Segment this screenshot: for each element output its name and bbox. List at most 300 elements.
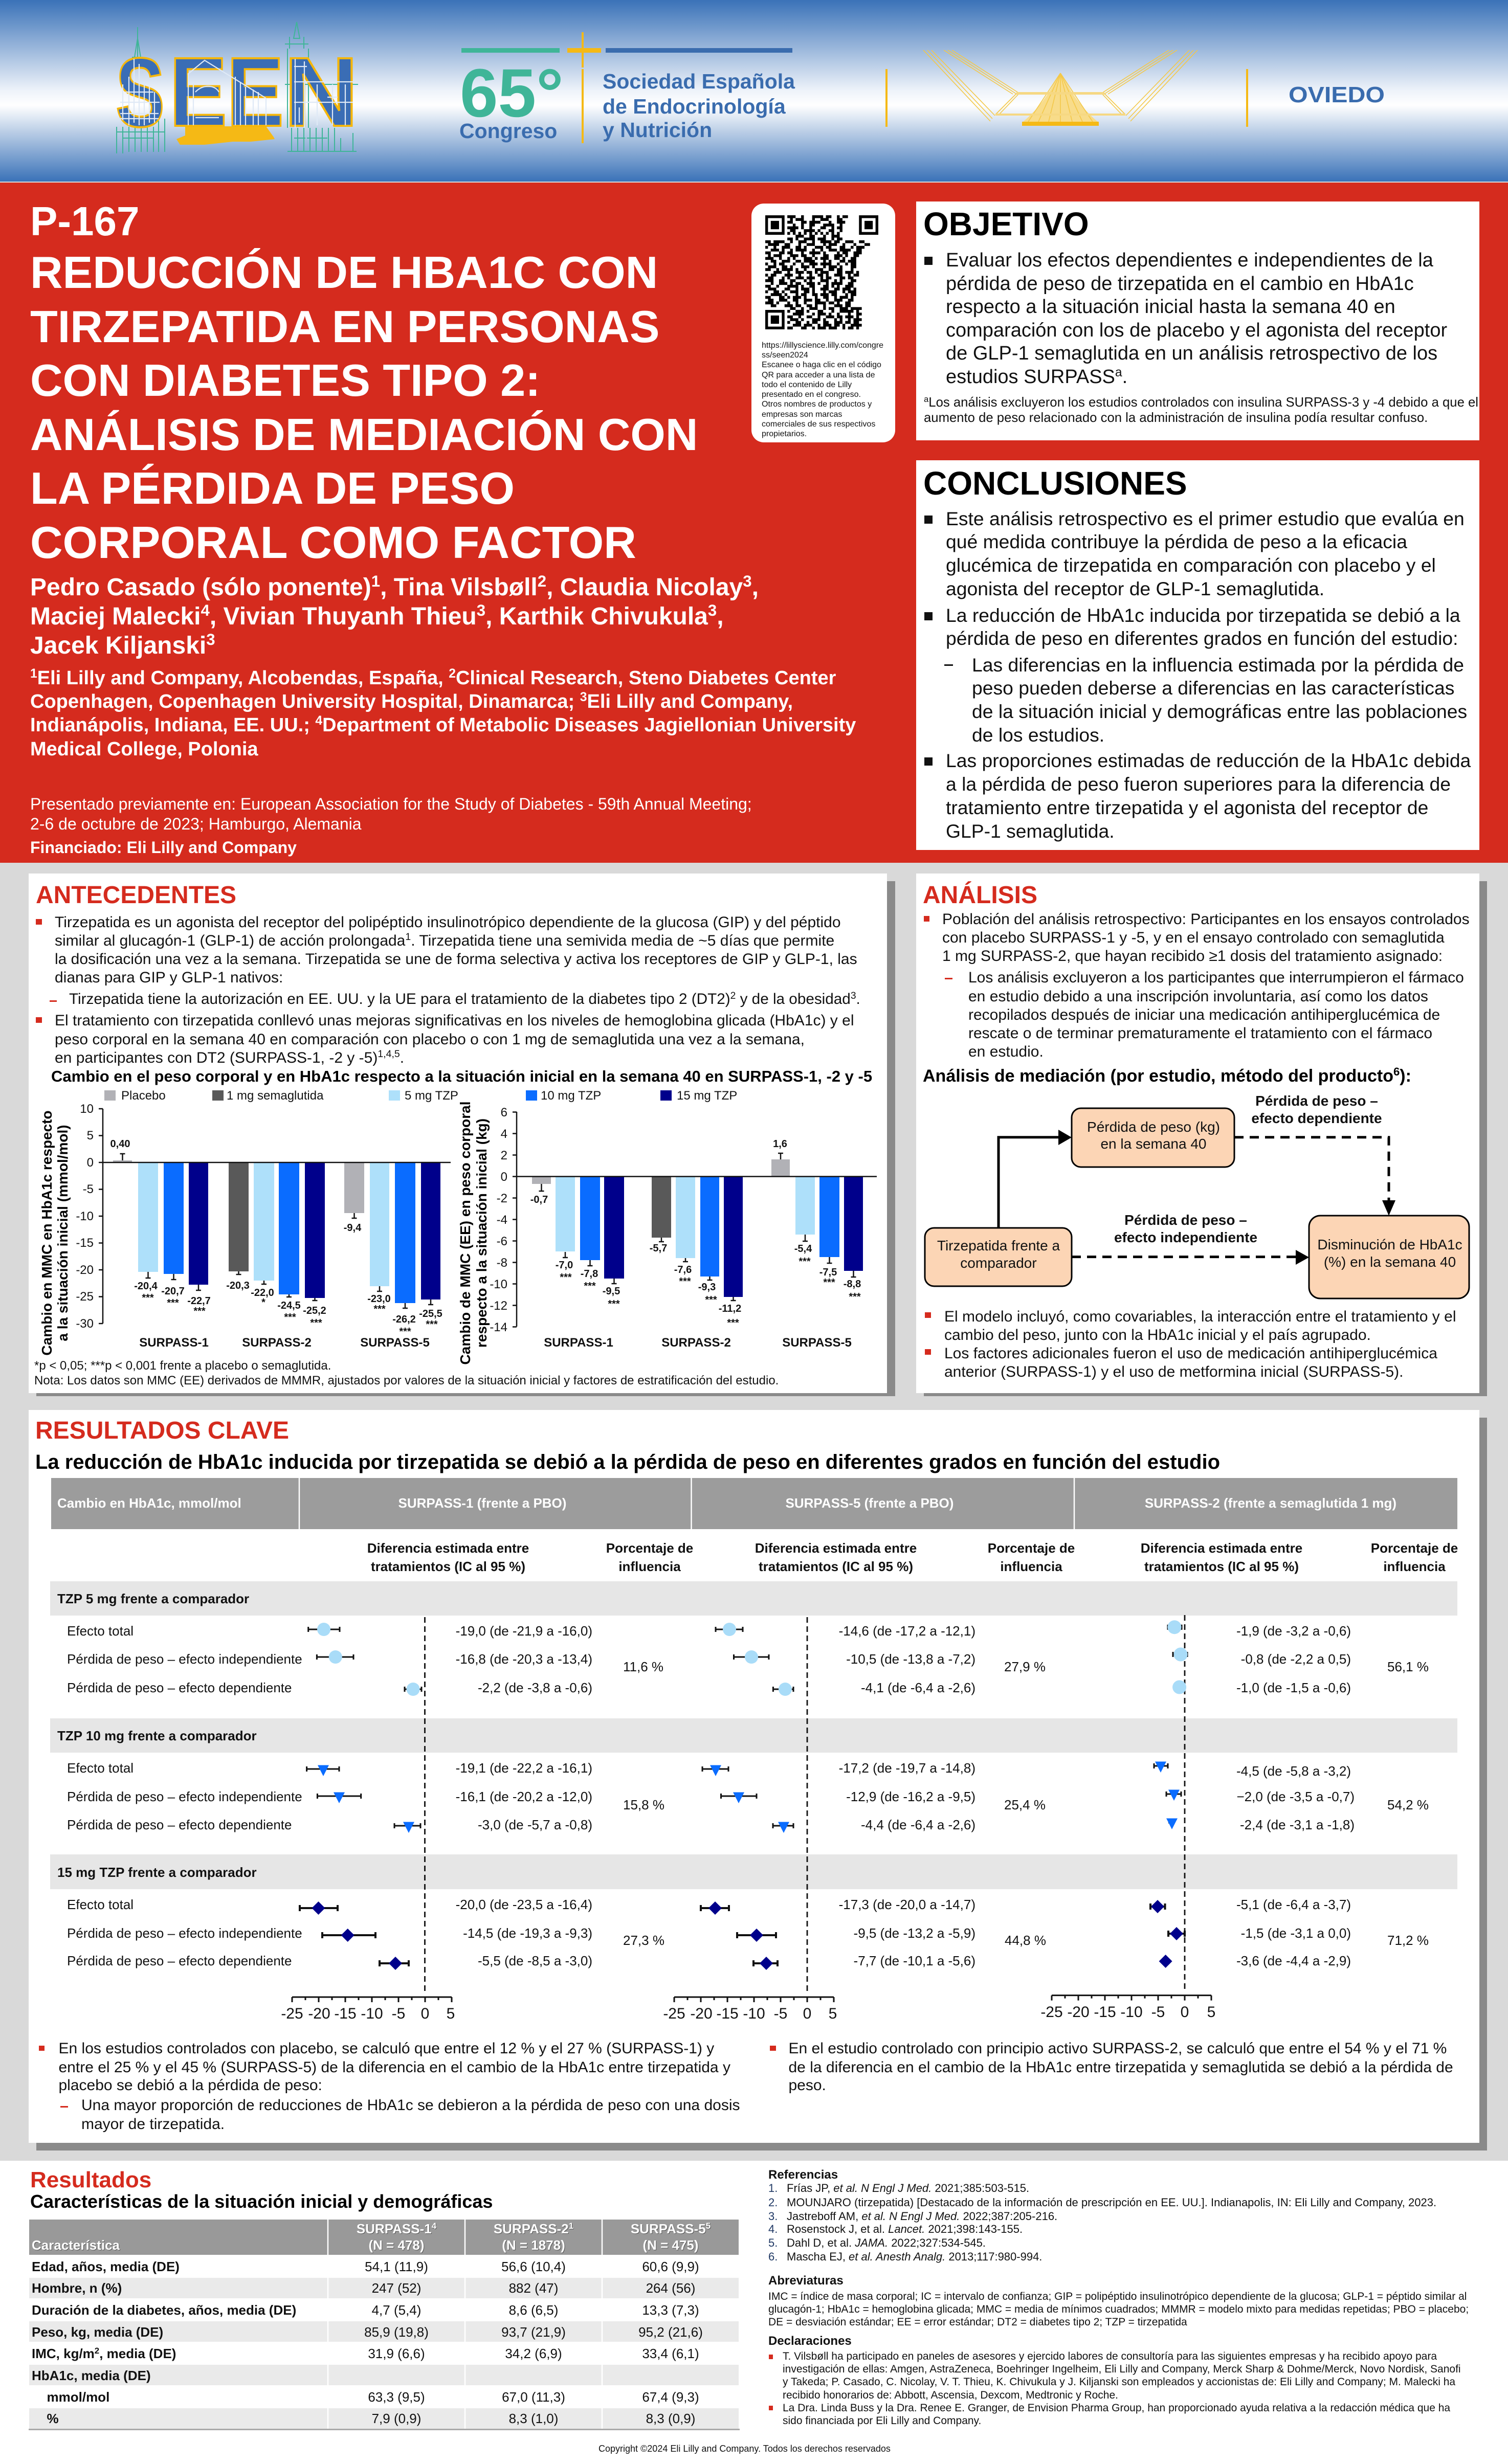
panel: antecedentes — [29, 873, 895, 1396]
row labels: Duración de la diabetes, años, media (DE) — [32, 2302, 296, 2318]
legend: 10 mg TZP — [541, 1089, 601, 1103]
text block: recopilados después de iniciar una medicación antihiperglucémica de — [968, 1006, 1440, 1023]
QR text — [762, 341, 883, 438]
category labels — [139, 1336, 430, 1350]
letters: E — [169, 37, 227, 147]
values: SURPASS-5: -7,7 (de -10,1 a -5,6) — [854, 1953, 975, 1968]
legend — [104, 1089, 737, 1103]
results text left: placebo se debió a la pérdida de peso: — [58, 2077, 322, 2094]
y tick labels: -10 — [490, 1278, 507, 1291]
values: SURPASS-1: -20,0 (de -23,5 a -16,4) — [456, 1897, 592, 1912]
panel: objetivo — [916, 201, 1479, 440]
column subheaders: Porcentaje de — [606, 1540, 693, 1556]
influence percentages: 27,3 % — [623, 1933, 664, 1948]
label: independent effect: efecto independiente — [1114, 1229, 1257, 1245]
column subheaders: Diferencia estimada entre — [367, 1540, 529, 1556]
box: weight loss — [1072, 1108, 1234, 1167]
column subheaders: influencia — [1383, 1559, 1446, 1574]
values: 60,6 (9,9) — [642, 2259, 699, 2274]
header banner — [0, 0, 1508, 182]
table header: Cambio en HbA1c, mmol/mol — [57, 1495, 241, 1511]
influence percentages: 56,1 % — [1387, 1659, 1429, 1674]
values — [364, 2259, 703, 2426]
value labels: -20,7 — [161, 1286, 185, 1297]
letters: E — [227, 37, 284, 147]
label: dependent effect: efecto dependiente — [1251, 1110, 1382, 1126]
value labels: *** — [849, 1291, 861, 1303]
error bars — [120, 1154, 433, 1308]
declarations: T. Vilsbøll ha participado en paneles de asesores y ejercido labores de consultoría para las siguientes empresas y ha recibido apoyo para — [783, 2350, 1437, 2362]
y tick labels: -25 — [76, 1290, 94, 1304]
results text left: Una mayor proporción de reducciones de HbA1c se debieron a la pérdida de peso con una dosis — [81, 2097, 740, 2114]
values: 31,9 (6,6) — [368, 2346, 425, 2361]
affiliations — [30, 667, 856, 760]
abbreviations: glucagón-1; HbA1c = hemoglobina glicada; MMC = media de mínimos cuadrados; MMMR = modelo mixto para medidas repetidas; PBO = placebo; — [768, 2303, 1469, 2315]
text block — [942, 911, 1470, 1060]
values: SURPASS-1: -19,1 (de -22,2 a -16,1) — [456, 1760, 592, 1776]
text block: Tirzepatida tiene la autorización en EE. UU. y la UE para el tratamiento de la diabetes tipo 2 (DT2)2 y de la obesidad3. — [69, 990, 860, 1007]
chart notes: *p < 0,05; ***p < 0,001 frente a placebo o semaglutida. — [34, 1359, 331, 1373]
row labels: % — [47, 2411, 59, 2426]
values: SURPASS-2: -3,6 (de -4,4 a -2,9) — [1236, 1953, 1351, 1968]
value labels: *** — [560, 1272, 572, 1283]
values: 882 (47) — [509, 2280, 558, 2296]
forest axis: SURPASS-2: 5 — [1207, 2004, 1215, 2021]
title — [30, 247, 698, 568]
text block: peso pueden deberse a diferencias en las características — [972, 677, 1454, 699]
legend: 1 mg semaglutida — [227, 1089, 324, 1103]
title: LA PÉRDIDA DE PESO — [30, 463, 515, 513]
authors — [30, 572, 759, 659]
text block — [55, 914, 860, 1066]
values: SURPASS-2 — [1236, 1623, 1355, 1968]
values: 63,3 (9,5) — [368, 2389, 425, 2405]
subheading: La reducción de HbA1c inducida por tirzepatida se debió a la pérdida de peso en diferentes grados en función del estudio — [35, 1451, 1220, 1473]
letters: N — [284, 37, 359, 147]
table header text: (N = 475) — [642, 2237, 699, 2253]
references: 5. — [768, 2236, 778, 2249]
arrow: weight-independent effect — [1072, 1250, 1309, 1265]
value labels: -22,0 — [251, 1287, 274, 1298]
white cathedral lines — [120, 59, 353, 128]
bullets — [924, 516, 953, 766]
table header text: SURPASS-55 — [631, 2221, 711, 2236]
values: SURPASS-1: -19,0 (de -21,9 a -16,0) — [456, 1623, 592, 1639]
y tick labels: 4 — [501, 1127, 507, 1141]
forest axis: SURPASS-2 — [1040, 1996, 1215, 2021]
results text right — [770, 2040, 1453, 2094]
previous presentation note: Financiado: Eli Lilly and Company — [30, 838, 297, 857]
value labels: -5,4 — [794, 1243, 812, 1255]
forest axis: SURPASS-2: -10 — [1120, 2004, 1143, 2021]
axes — [513, 1112, 877, 1327]
declarations: recibido honorarios de: Abbott, Ascensia, Dexcom, Medtronic y Roche. — [783, 2389, 1118, 2401]
category labels: SURPASS-2 — [661, 1336, 731, 1350]
affiliations: Medical College, Polonia — [30, 738, 258, 760]
box: weight loss: en la semana 40 — [1100, 1136, 1207, 1152]
row labels: Pérdida de peso – efecto independiente — [67, 1925, 302, 1941]
forest axis: SURPASS-5: 5 — [829, 2005, 837, 2022]
subheading: Características de la situación inicial y demográficas — [30, 2191, 493, 2212]
declarations: Declaraciones — [768, 2334, 852, 2348]
y tick labels: 2 — [501, 1149, 507, 1162]
QR panel — [751, 204, 895, 442]
values: 93,7 (21,9) — [501, 2324, 566, 2340]
model notes: cambio del peso, junto con la HbA1c inicial y el país agrupado. — [944, 1327, 1371, 1343]
legend: 15 mg TZP — [677, 1089, 737, 1103]
value labels: *** — [193, 1306, 206, 1317]
QR text: Otros nombres de productos y — [762, 400, 872, 409]
values: SURPASS-1: -16,1 (de -20,2 a -12,0) — [456, 1789, 592, 1804]
values: 95,2 (21,6) — [638, 2324, 703, 2340]
value labels: *** — [310, 1317, 322, 1329]
values: 67,4 (9,3) — [642, 2389, 699, 2405]
logo: 65 Congreso: Congreso — [459, 119, 557, 143]
value labels: -5,7 — [650, 1243, 667, 1254]
references: 2. — [768, 2196, 778, 2209]
text block: tratamiento entre tirzepatida y el agonista del receptor de — [946, 797, 1428, 818]
text block: similar al glucagón-1 (GLP-1) de acción prolongada1. Tirzepatida tiene una semivida media de ~5 días que permite — [55, 931, 834, 949]
text block: pérdida de peso de tirzepatida en el cambio en HbA1c — [946, 273, 1414, 295]
values: SURPASS-2: -4,5 (de -5,8 a -3,2) — [1236, 1763, 1351, 1779]
legend: 5 mg TZP — [405, 1089, 458, 1103]
values: 8,6 (6,5) — [509, 2302, 558, 2318]
box: weight loss: Pérdida de peso (kg) — [1087, 1119, 1220, 1135]
y tick labels — [490, 1106, 507, 1334]
values: SURPASS-2: -5,1 (de -6,4 a -3,7) — [1236, 1897, 1351, 1912]
influence percentages — [623, 1659, 1429, 1948]
row labels: Pérdida de peso – efecto independiente — [67, 1651, 302, 1667]
value labels: -9,5 — [603, 1286, 620, 1297]
column subheaders: Diferencia estimada entre — [1141, 1540, 1302, 1556]
label: independent effect: Pérdida de peso – — [1124, 1212, 1247, 1228]
value labels: -7,0 — [556, 1260, 573, 1271]
title: TIRZEPATIDA EN PERSONAS — [30, 301, 659, 352]
table header: SURPASS-1 (frente a PBO) — [398, 1495, 566, 1511]
values: SURPASS-5: -14,6 (de -17,2 a -12,1) — [839, 1623, 975, 1639]
value labels: 1,6 — [773, 1138, 787, 1150]
value labels: -25,5 — [419, 1308, 442, 1319]
column subheaders: tratamientos (IC al 95 %) — [371, 1559, 525, 1574]
authors: Maciej Malecki4, Vivian Thuyanh Thieu3, Karthik Chivukula3, — [30, 601, 724, 630]
values: SURPASS-1: -2,2 (de -3,8 a -0,6) — [478, 1680, 592, 1695]
row labels: Pérdida de peso – efecto dependiente — [67, 1680, 292, 1695]
values: SURPASS-5: -4,1 (de -6,4 a -2,6) — [861, 1680, 975, 1695]
row labels: HbA1c, media (DE) — [32, 2368, 151, 2383]
footnote — [924, 394, 1478, 425]
letters: S — [116, 37, 165, 147]
forest axis: SURPASS-5: -10 — [743, 2005, 765, 2022]
arrow: tirzepatide to weight loss — [999, 1130, 1072, 1228]
text block: rescate o de terminar prematuramente el tratamiento con el fármaco — [968, 1025, 1432, 1042]
footnote: aumento de peso relacionado con la administración de insulina podía resultar confuso. — [924, 411, 1428, 425]
value labels: *** — [373, 1304, 386, 1315]
declarations: y Takeda; P. Casado, C. Nicolay, V. T. Thieu, K. Chivukula y J. Kiljanski son empleados y accionistas de: Eli Lilly and Company; M. Malecki ha — [783, 2376, 1455, 2388]
value labels: *** — [167, 1297, 179, 1309]
declarations: investigación de ellas: Amgen, AstraZeneca, Boehringer Ingelheim, Eli Lilly and Company, Merck Sharp & Dohme/Merck, Novo Nordisk, Sanofi — [783, 2363, 1461, 2375]
row labels — [32, 2259, 296, 2426]
row labels: Peso, kg, media (DE) — [32, 2324, 163, 2340]
title panel (red) — [0, 183, 1508, 863]
references: Frías JP, et al. N Engl J Med. 2021;385:503-515. — [787, 2182, 1029, 2194]
values: SURPASS-2: -1,5 (de -3,1 a 0,0) — [1241, 1925, 1351, 1941]
value labels: -0,7 — [530, 1194, 548, 1205]
column subheaders: Diferencia estimada entre — [755, 1540, 917, 1556]
forest axis: SURPASS-1: -10 — [361, 2005, 383, 2022]
results text left — [39, 2040, 740, 2133]
value labels: -20,4 — [134, 1281, 158, 1292]
value labels: *** — [799, 1256, 811, 1267]
y tick labels: -2 — [497, 1192, 507, 1205]
text block: Evaluar los efectos dependientes e independientes de la — [946, 250, 1434, 271]
forest axis: SURPASS-1: 0 — [421, 2005, 429, 2022]
text block: Población del análisis retrospectivo: Participantes en los ensayos controlados — [942, 911, 1470, 928]
text block: respecto a la situación inicial hasta la semana 40 en — [946, 296, 1395, 318]
text block: en participantes con DT2 (SURPASS-1, -2 y -5)1,4,5. — [55, 1048, 404, 1066]
references: Referencias — [768, 2168, 838, 2182]
affiliations: Indianápolis, Indiana, EE. UU.; 4Department of Metabolic Diseases Jagiellonian University — [30, 714, 856, 736]
values: SURPASS-2: -0,8 (de -2,2 a 0,5) — [1241, 1651, 1351, 1667]
panel: conclusiones — [916, 460, 1479, 850]
value labels: -23,0 — [367, 1293, 391, 1305]
value labels: *** — [142, 1292, 154, 1304]
row labels — [67, 1623, 302, 1968]
column subheaders: Porcentaje de — [1371, 1540, 1458, 1556]
category labels: SURPASS-2 — [242, 1336, 312, 1350]
value labels: -7,6 — [674, 1264, 692, 1275]
flow diagram — [925, 1093, 1469, 1298]
values: SURPASS-2: −2,0 (de -3,5 a -0,7) — [1236, 1789, 1355, 1804]
forest plot: SURPASS-5 — [701, 1623, 793, 1970]
references: 3. — [768, 2210, 778, 2223]
y tick labels: -20 — [76, 1263, 94, 1277]
y tick labels: 6 — [501, 1106, 507, 1119]
forest axis: SURPASS-5 — [663, 1997, 837, 2022]
category labels — [544, 1336, 852, 1350]
category labels: SURPASS-1 — [544, 1336, 613, 1350]
heading: ANTECEDENTES — [36, 882, 236, 909]
title: ANÁLISIS DE MEDIACIÓN CON — [30, 409, 698, 460]
label: dependent effect: Pérdida de peso – — [1255, 1093, 1378, 1109]
references: 6. — [768, 2250, 778, 2263]
forest axis: SURPASS-1: -25 — [281, 2005, 303, 2022]
y axis title — [39, 1110, 71, 1356]
references: Jastreboff AM, et al. N Engl J Med. 2022;387:205-216. — [787, 2210, 1057, 2223]
influence percentages: 15,8 % — [623, 1797, 664, 1812]
forest axis: SURPASS-2: -20 — [1067, 2004, 1090, 2021]
value labels: -11,2 — [719, 1303, 741, 1314]
model notes — [944, 1308, 1456, 1380]
baseline table — [29, 2220, 740, 2430]
group rows — [50, 1581, 1457, 1889]
value labels: *** — [679, 1276, 691, 1287]
abbreviations — [768, 2274, 1469, 2328]
y tick labels: -8 — [497, 1256, 507, 1270]
bullets — [36, 919, 57, 1023]
value labels — [530, 1138, 861, 1329]
value labels: *** — [608, 1298, 620, 1310]
value labels: *** — [727, 1317, 739, 1329]
table header text: (N = 478) — [368, 2237, 425, 2253]
y tick labels: 10 — [80, 1102, 94, 1116]
row labels: Efecto total — [67, 1760, 134, 1776]
values: 4,7 (5,4) — [372, 2302, 421, 2318]
y tick labels: -30 — [76, 1317, 94, 1331]
values: SURPASS-2: -1,9 (de -3,2 a -0,6) — [1236, 1623, 1351, 1639]
values: SURPASS-5: -9,5 (de -13,2 a -5,9) — [854, 1925, 975, 1941]
abbreviations: IMC = índice de masa corporal; IC = intervalo de confianza; GIP = polipéptido insulinotrópico dependiente de la glucosa; GLP-1 = péptido similar al — [768, 2291, 1467, 2302]
y tick labels: -14 — [490, 1320, 507, 1334]
subheading: Análisis de mediación (por estudio, método del producto6): — [923, 1065, 1411, 1086]
affiliations: Copenhagen, Copenhagen University Hospital, Dinamarca; 3Eli Lilly and Company, — [30, 690, 793, 712]
logo: 65 Congreso: de Endocrinología — [603, 95, 786, 118]
values: SURPASS-1: -3,0 (de -5,7 a -0,8) — [478, 1817, 592, 1832]
panel: resultados clave — [29, 1410, 1487, 2151]
box: HbA1c decrease: Disminución de HbA1c — [1317, 1237, 1462, 1252]
bullet — [924, 257, 933, 265]
results text right: peso. — [789, 2077, 826, 2094]
influence percentages: 44,8 % — [1005, 1933, 1046, 1948]
group rows: TZP 5 mg frente a comparador — [57, 1591, 249, 1606]
row labels: mmol/mol — [47, 2389, 109, 2405]
box: HbA1c decrease: (%) en la semana 40 — [1324, 1254, 1456, 1270]
label: independent effect — [1114, 1212, 1257, 1245]
row labels: Efecto total — [67, 1897, 134, 1912]
row labels: Efecto total — [67, 1623, 134, 1639]
values: 67,0 (11,3) — [502, 2389, 565, 2405]
values: 34,2 (6,9) — [505, 2346, 562, 2361]
value labels: -9,3 — [698, 1282, 716, 1293]
influence percentages: 71,2 % — [1387, 1933, 1429, 1948]
logo: SEEN — [116, 22, 359, 153]
logo: 65 Congreso — [459, 32, 795, 143]
forest axis: SURPASS-5: -15 — [716, 2005, 739, 2022]
value labels: *** — [705, 1294, 717, 1306]
box: tirzepatide: Tirzepatida frente a — [937, 1238, 1060, 1253]
values: 264 (56) — [646, 2280, 695, 2296]
text block: Tirzepatida es un agonista del receptor del polipéptido insulinotrópico dependiente de la glucosa (GIP) y del péptido — [55, 914, 841, 931]
QR text: presentado en el congreso. — [762, 390, 861, 399]
box: HbA1c decrease — [1309, 1216, 1469, 1298]
values: SURPASS-5: -17,3 (de -20,0 a -14,7) — [839, 1897, 975, 1912]
logo: 65 Congreso: 65° — [460, 55, 564, 131]
text block — [946, 508, 1471, 842]
heading: Resultados — [30, 2167, 151, 2192]
bars — [113, 1160, 440, 1303]
text block: La reducción de HbA1c inducida por tirzepatida se debió a la — [946, 604, 1460, 626]
table header text — [32, 2221, 711, 2253]
values: 54,1 (11,9) — [365, 2259, 428, 2274]
bullets — [924, 916, 952, 1355]
results text left: entre el 25 % y el 45 % (SURPASS-5) de la diferencia en el cambio de la HbA1c entre tirzepatida y — [58, 2059, 730, 2076]
value labels: * — [261, 1297, 265, 1308]
column subheaders — [367, 1540, 1458, 1574]
logo: Oviedo wings: OVIEDO — [1289, 82, 1385, 107]
row labels: Hombre, n (%) — [32, 2280, 122, 2296]
logo: 65 Congreso: y Nutrición — [603, 118, 712, 142]
values: SURPASS-2: -1,0 (de -1,5 a -0,6) — [1236, 1680, 1351, 1695]
chart title: Cambio en el peso corporal y en HbA1c respecto a la situación inicial en la semana 40 en SURPASS-1, -2 y -5 — [51, 1067, 872, 1085]
row labels: Edad, años, media (DE) — [32, 2259, 180, 2274]
QR text: empresas son marcas — [762, 410, 842, 419]
text block: en estudio. — [968, 1043, 1044, 1060]
column subheaders: Porcentaje de — [988, 1540, 1075, 1556]
y tick labels: 0 — [87, 1156, 94, 1170]
table header: SURPASS-2 (frente a semaglutida 1 mg) — [1145, 1495, 1396, 1511]
heading: ANÁLISIS — [923, 881, 1037, 909]
text block: Los análisis excluyeron a los participantes que interrumpieron el fármaco — [968, 969, 1464, 986]
forest axis: SURPASS-1 — [281, 1997, 455, 2022]
value labels: -20,3 — [226, 1280, 250, 1291]
values: SURPASS-1 — [456, 1623, 592, 1968]
abbreviations: DE = desviación estándar; EE = error estándar; DT2 = diabetes tipo 2; TZP = tirzepatida — [768, 2316, 1187, 2328]
value labels: 0,40 — [110, 1138, 130, 1150]
abbreviations: Abreviaturas — [768, 2274, 844, 2288]
forest axis: SURPASS-5: -5 — [774, 2005, 787, 2022]
values: SURPASS-5: -17,2 (de -19,7 a -14,8) — [839, 1760, 975, 1776]
legend: Placebo — [121, 1089, 166, 1103]
footnote: aLos análisis excluyeron los estudios controlados con insulina SURPASS-3 y -4 debido a que el — [924, 394, 1478, 410]
forest axis: SURPASS-1: -15 — [334, 2005, 357, 2022]
title: CON DIABETES TIPO 2: — [30, 355, 540, 406]
QR text: propietarios. — [762, 430, 807, 438]
text block: en estudio debido a una inscripción involuntaria, así como los datos — [968, 988, 1428, 1005]
text block: de GLP-1 semaglutida en un análisis retrospectivo de los — [946, 343, 1437, 364]
affiliations: 1Eli Lilly and Company, Alcobendas, España, 2Clinical Research, Steno Diabetes Center — [30, 667, 836, 689]
influence percentages: 54,2 % — [1387, 1797, 1429, 1812]
panel: footer section — [0, 2161, 1508, 2464]
value labels — [110, 1138, 442, 1337]
forest axis: SURPASS-1: -20 — [308, 2005, 330, 2022]
bars — [532, 1159, 863, 1297]
QR text: https://lillyscience.lilly.com/congre — [762, 341, 883, 350]
value labels: -8,8 — [844, 1279, 861, 1290]
forest axis: SURPASS-1: -5 — [392, 2005, 405, 2022]
label: dependent effect — [1251, 1093, 1382, 1126]
table header — [51, 1478, 1457, 1529]
chart notes — [34, 1359, 779, 1387]
column subheaders: tratamientos (IC al 95 %) — [1144, 1559, 1299, 1574]
value labels: *** — [284, 1312, 296, 1323]
value labels: -7,8 — [581, 1268, 598, 1280]
results text right: En el estudio controlado con principio activo SURPASS-2, se calculó que entre el 54 % y el 71 % — [789, 2040, 1447, 2057]
title: REDUCCIÓN DE HBA1C CON — [30, 247, 658, 298]
table header: SURPASS-5 (frente a PBO) — [786, 1495, 953, 1511]
y tick labels — [76, 1102, 94, 1331]
text block: glucémica de tirzepatida en comparación con placebo y el — [946, 554, 1436, 576]
heading: RESULTADOS CLAVE — [35, 1417, 289, 1444]
text block: Las proporciones estimadas de reducción de la HbA1c debida — [946, 750, 1471, 771]
row labels: Pérdida de peso – efecto independiente — [67, 1789, 302, 1804]
y tick labels: 0 — [501, 1170, 507, 1184]
references — [768, 2168, 1436, 2263]
y axis title: Cambio en MMC en HbA1c respecto — [39, 1110, 55, 1356]
table header text: SURPASS-14 — [357, 2221, 437, 2236]
influence percentages: 25,4 % — [1004, 1797, 1046, 1812]
panel: análisis — [916, 873, 1487, 1396]
QR text: comerciales de sus respectivos — [762, 420, 875, 429]
results text left: mayor de tirzepatida. — [81, 2116, 225, 2133]
QR text: Escanee o haga clic en el código — [762, 361, 881, 369]
results text left: En los estudios controlados con placebo, se calculó que entre el 12 % y el 27 % (SURPASS-1) y — [58, 2040, 714, 2057]
y axis title: Cambio de MMC (EE) en peso corporal — [457, 1102, 473, 1364]
chart notes: Nota: Los datos son MMC (EE) derivados de MMMR, ajustados por valores de la situación inicial y factores de estratificación del estudio. — [34, 1374, 779, 1387]
value labels: -26,2 — [392, 1314, 416, 1325]
y tick labels: -5 — [83, 1182, 94, 1196]
value labels: *** — [399, 1326, 411, 1337]
text block: GLP-1 semaglutida. — [946, 820, 1115, 842]
values: SURPASS-5 — [839, 1623, 975, 1968]
